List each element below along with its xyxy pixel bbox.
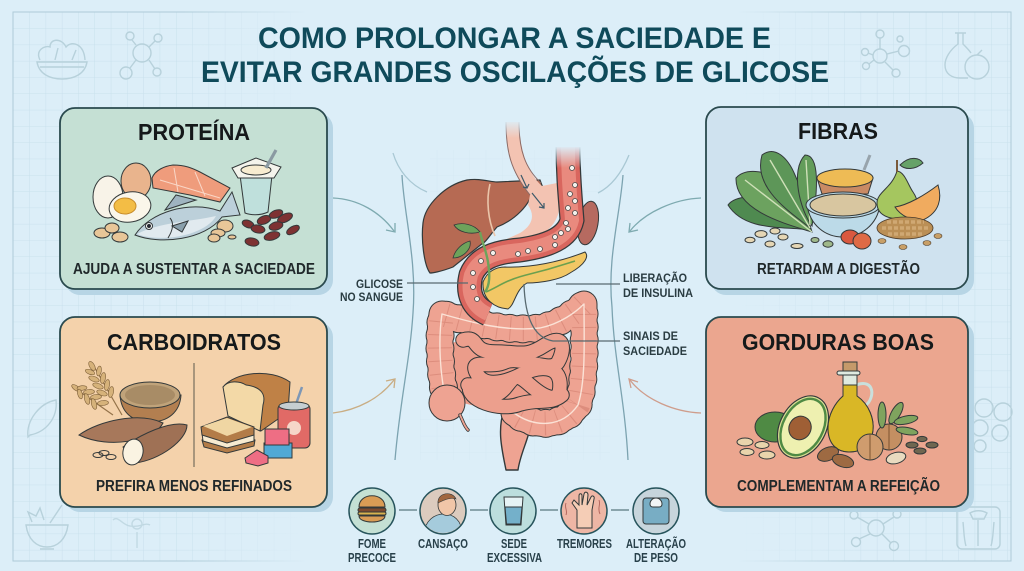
label: liberação de insulina: LIBERAÇÃO xyxy=(623,270,687,285)
icon: seeds xyxy=(737,436,938,459)
label: sinais de saciedade: SINAIS DE xyxy=(623,329,678,343)
icon: tired person xyxy=(426,493,460,533)
icon: burger xyxy=(358,496,386,522)
icon: bread loaf xyxy=(223,373,290,431)
title xyxy=(201,22,829,89)
decorative icon: bottom right molecule xyxy=(850,510,901,550)
symptom: sede excessiva xyxy=(487,488,542,565)
decorative icon: salad bowl xyxy=(37,40,87,79)
caption: PREFIRA MENOS REFINADOS xyxy=(96,478,292,495)
symptom: tremores: TREMORES xyxy=(557,537,612,551)
icon: shaking hand xyxy=(565,492,600,528)
heading: carboidratos: CARBOIDRATOS xyxy=(107,329,281,355)
title: COMO PROLONGAR A SACIEDADE E xyxy=(258,22,771,55)
symptom: sede excessiva: EXCESSIVA xyxy=(487,551,542,565)
symptom: alteração de peso: DE PESO xyxy=(634,551,678,565)
icon: oats and seeds xyxy=(745,228,833,248)
decorative icon: sweet potato left xyxy=(28,400,56,437)
arrow: carboidratos to body xyxy=(333,379,395,413)
label: liberação de insulina: DE INSULINA xyxy=(623,286,693,300)
icon: leafy greens xyxy=(728,152,816,232)
arrow: proteína to body xyxy=(333,198,395,232)
icon: melon slice xyxy=(895,185,940,220)
decorative icon: molecule top left xyxy=(120,32,162,79)
symptom: fome precoce: PRECOCE xyxy=(348,551,396,565)
arrow: fibras to body xyxy=(629,198,701,232)
leader lines xyxy=(407,283,620,341)
label: sinais de saciedade xyxy=(623,329,687,358)
title: EVITAR GRANDES OSCILAÇÕES DE GLICOSE xyxy=(201,55,829,89)
icon: olive oil bottle xyxy=(828,362,873,452)
heading: proteína: PROTEÍNA xyxy=(138,118,250,145)
icon: grain bowl back xyxy=(817,155,873,194)
label: glicose no sangue: GLICOSE xyxy=(356,277,403,291)
icon: sweet potatoes xyxy=(79,418,187,467)
icon: avocado xyxy=(755,387,839,467)
panel: carboidratos xyxy=(60,317,333,512)
icon: nuts xyxy=(94,220,236,242)
organ: large intestine xyxy=(429,304,584,470)
organ: small intestine xyxy=(463,339,562,407)
symptom: cansaço xyxy=(418,488,468,551)
label: liberação de insulina xyxy=(623,270,693,300)
organ: liver xyxy=(422,179,543,273)
icon: bread slices xyxy=(201,417,255,453)
decorative icon: flask and apple xyxy=(945,33,989,79)
label: glicose no sangue: NO SANGUE xyxy=(340,290,403,304)
stomach arrows xyxy=(521,175,544,208)
icon: salmon xyxy=(152,165,230,202)
icon: beans xyxy=(241,208,301,247)
icon: water glass xyxy=(504,497,523,525)
decorative icon: bottom right scale xyxy=(957,507,1000,549)
icon: walnuts xyxy=(857,424,907,466)
icon: fish xyxy=(135,192,240,240)
arrow: gorduras to body xyxy=(629,379,701,413)
decorative icon: molecule top right xyxy=(862,30,910,77)
icon: apricots xyxy=(841,230,871,249)
icon: oat bowl xyxy=(806,192,880,237)
glucose dots xyxy=(470,166,578,302)
icon: bathroom scale xyxy=(643,498,669,524)
icon: olive leaves xyxy=(878,400,919,436)
decorative icon: bottom left swirl xyxy=(113,519,150,548)
icon: lentils xyxy=(877,217,942,250)
symptom: cansaço: CANSAÇO xyxy=(418,537,468,551)
label: glicose no sangue xyxy=(340,277,403,304)
organ: esophagus and stomach xyxy=(470,120,584,314)
symptom: fome precoce xyxy=(348,488,396,565)
caption: AJUDA A SUSTENTAR A SACIEDADE xyxy=(73,261,315,278)
organ diagram xyxy=(422,120,602,470)
symptom: sede excessiva: SEDE xyxy=(501,537,527,551)
organ: pancreas xyxy=(483,252,587,309)
heading: gorduras boas: GORDURAS BOAS xyxy=(742,329,934,355)
label: sinais de saciedade: SACIEDADE xyxy=(623,344,687,358)
icon: almonds xyxy=(815,444,855,470)
decorative icon: circles right xyxy=(972,399,1012,452)
icon: pear xyxy=(877,158,923,219)
divider xyxy=(193,363,195,467)
symptom: fome precoce: FOME xyxy=(358,537,386,551)
caption: RETARDAM A DIGESTÃO xyxy=(757,260,920,278)
icon: soda can xyxy=(278,387,310,448)
panel: fibras xyxy=(706,107,974,295)
icon: eggs xyxy=(93,163,153,225)
symptom: tremores xyxy=(557,488,612,551)
decorative icon: bottom left bowl xyxy=(26,505,68,549)
icon: yogurt cup xyxy=(232,150,281,215)
panel: proteína xyxy=(60,108,333,295)
icon: wheat xyxy=(71,360,122,415)
symptom: alteração de peso xyxy=(626,488,686,565)
icon: sugar cubes xyxy=(245,429,292,466)
icon: grain bowl xyxy=(120,382,181,422)
heading: fibras: FIBRAS xyxy=(798,118,878,144)
organ: spleen xyxy=(574,200,602,246)
body outline xyxy=(393,153,629,460)
organ: gallbladder and duct xyxy=(453,224,489,292)
symptom connectors xyxy=(399,509,629,511)
caption: COMPLEMENTAM A REFEIÇÃO xyxy=(737,477,940,495)
panel: gorduras boas xyxy=(706,317,974,512)
symptom: alteração de peso: ALTERAÇÃO xyxy=(626,536,686,551)
